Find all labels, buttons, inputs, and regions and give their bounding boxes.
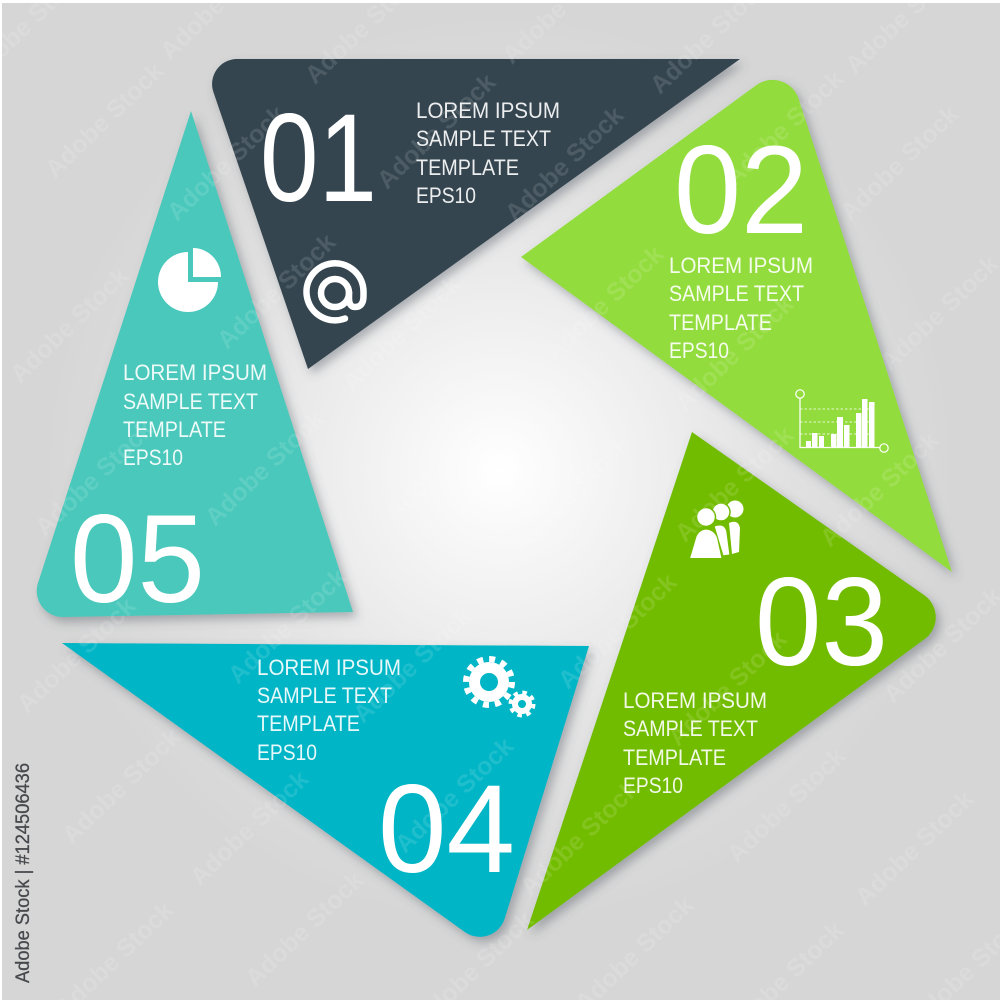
watermarks: Adobe Stock — [348, 602, 477, 728]
watermarks: Adobe Stock — [815, 426, 944, 552]
panel shape 01 — [212, 59, 740, 369]
watermarks: Adobe Stock — [540, 240, 669, 366]
number 02: 02 — [674, 121, 808, 260]
text block 04: SAMPLE TEXT — [257, 683, 392, 708]
watermarks: Adobe Stock — [240, 866, 369, 992]
watermarks: Adobe Stock — [390, 732, 519, 858]
panel shape 02 — [521, 80, 952, 572]
text block 05 — [123, 360, 267, 470]
text block 01: LOREM IPSUM — [416, 98, 560, 123]
watermarks: Adobe Stock — [515, 775, 644, 901]
number 04: 04 — [378, 760, 515, 899]
watermarks: Adobe Stock — [5, 262, 134, 388]
stock id label: Adobe Stock | #124506436 — [13, 763, 34, 983]
number 01: 01 — [260, 89, 377, 228]
panel shape 03 — [527, 432, 936, 930]
watermarks: Adobe Stock — [670, 290, 799, 416]
watermarks: Adobe Stock — [185, 765, 314, 891]
number 05: 05 — [70, 490, 205, 629]
text block 02: TEMPLATE — [669, 310, 772, 335]
panel 02: light green — [521, 80, 952, 572]
icon: gears — [466, 659, 534, 716]
watermarks: Adobe Stock — [40, 57, 169, 183]
text block 03: TEMPLATE — [623, 745, 726, 770]
text block 02: LOREM IPSUM — [669, 253, 813, 278]
text block 04: LOREM IPSUM — [257, 655, 401, 680]
text block 05: LOREM IPSUM — [123, 360, 267, 385]
number 03: 03 — [755, 553, 888, 692]
text block 05: TEMPLATE — [123, 417, 226, 442]
watermarks: Adobe Stock — [372, 68, 501, 194]
text block 01: EPS10 — [416, 183, 476, 208]
text block 03: EPS10 — [623, 773, 683, 798]
watermarks: Adobe Stock — [380, 400, 509, 526]
watermarks: Adobe Stock — [720, 65, 849, 191]
text block 03: LOREM IPSUM — [623, 688, 767, 713]
watermarks: Adobe Stock — [200, 405, 329, 531]
text block 02: EPS10 — [669, 338, 729, 363]
panel 05: teal — [37, 111, 353, 629]
panel shape 05 — [37, 111, 353, 617]
watermarks: Adobe Stock — [500, 101, 629, 227]
watermarks: Adobe Stock — [722, 742, 851, 868]
text block 05: EPS10 — [123, 445, 183, 470]
watermarks: Adobe Stock — [670, 421, 799, 547]
icon: people — [690, 500, 744, 558]
text block 04: EPS10 — [257, 740, 317, 765]
watermarks: Adobe Stock — [223, 563, 352, 689]
watermarks: Adobe Stock — [57, 723, 186, 849]
watermarks: Adobe Stock — [507, 430, 636, 556]
panel 04: cyan — [62, 643, 589, 937]
text block 02: SAMPLE TEXT — [669, 281, 804, 306]
panel 03: green — [527, 432, 936, 930]
text block 04: TEMPLATE — [257, 711, 360, 736]
watermarks: Adobe Stock — [850, 785, 979, 911]
icon: bar chart — [796, 390, 888, 452]
text block 03 — [623, 688, 767, 798]
panel 01: dark slate — [212, 59, 740, 369]
watermarks: Adobe Stock — [835, 100, 964, 226]
text block 01: TEMPLATE — [416, 155, 519, 180]
watermarks: Adobe Stock — [30, 415, 159, 541]
icon: pie chart — [158, 248, 221, 312]
text block 02 — [669, 253, 813, 363]
text block 05: SAMPLE TEXT — [123, 389, 258, 414]
watermarks: Adobe Stock — [12, 592, 141, 718]
text block 04 — [257, 655, 401, 765]
icon: at sign — [307, 263, 364, 320]
text block 01 — [416, 98, 560, 208]
panel shape 04 — [62, 643, 589, 937]
watermarks: Adobe Stock — [212, 228, 341, 354]
text block 03: SAMPLE TEXT — [623, 716, 758, 741]
watermarks: Adobe Stock — [553, 568, 682, 694]
text block 01: SAMPLE TEXT — [416, 126, 551, 151]
watermarks: Adobe Stock — [337, 270, 466, 396]
watermarks: Adobe Stock — [162, 100, 291, 226]
watermarks: Adobe Stock — [663, 625, 792, 751]
